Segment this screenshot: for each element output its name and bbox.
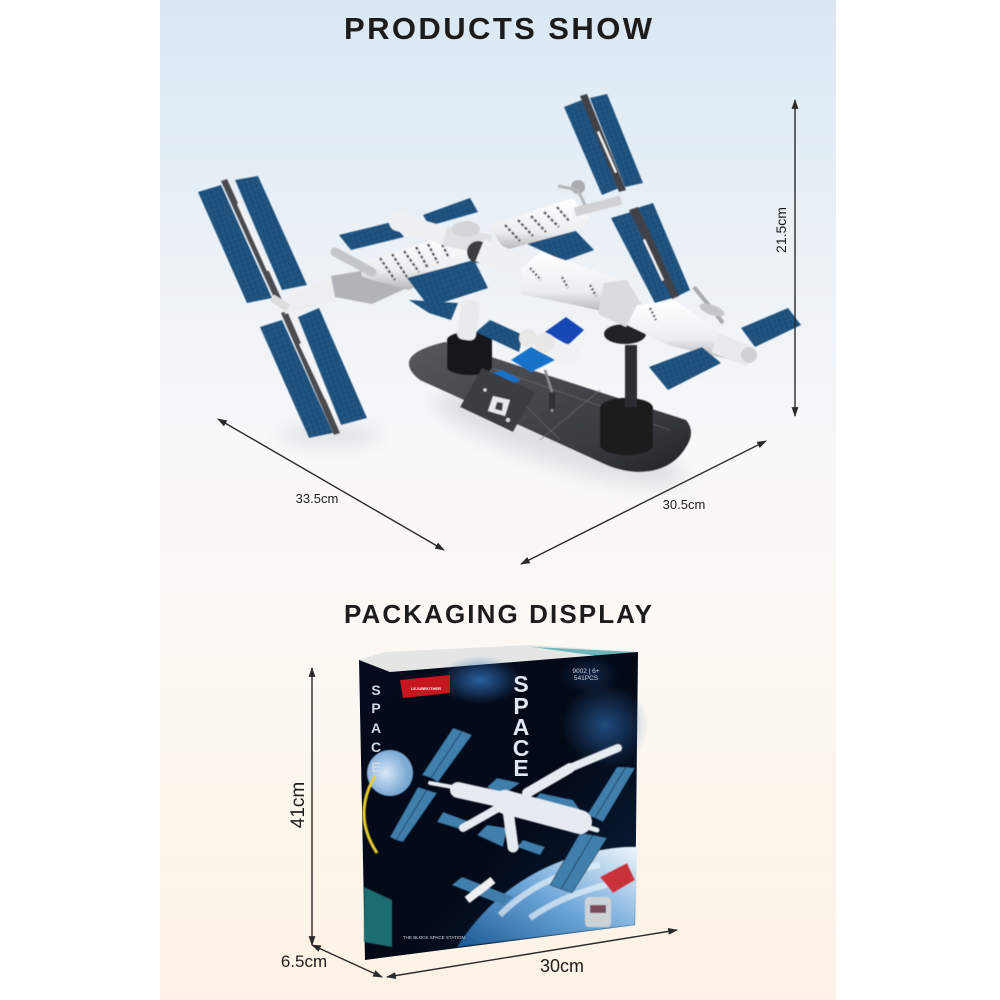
small craft on box <box>452 877 513 905</box>
package box <box>359 645 649 960</box>
nebula clouds <box>438 655 649 767</box>
box small print: THE BLOCK SPACE STATION <box>403 935 465 940</box>
spine title SPACE: E <box>371 759 381 775</box>
front title SPACE: A <box>513 714 529 740</box>
front title SPACE: C <box>513 735 529 761</box>
teal card <box>364 887 392 947</box>
dimension: 30cm <box>387 930 677 977</box>
left module <box>272 221 490 314</box>
brand label <box>400 675 450 698</box>
solar array: far left lower <box>260 308 367 438</box>
small panels behind <box>339 198 594 320</box>
dimension: 6.5cm <box>281 945 382 977</box>
solar array: upper right top <box>564 94 643 195</box>
front title SPACE <box>513 671 529 781</box>
yellow arc <box>364 776 377 853</box>
display base <box>409 299 691 472</box>
upper right module <box>488 180 621 250</box>
product number: 9002 | 6+ <box>572 668 600 675</box>
dimension: 41cm: 41cm <box>288 782 309 828</box>
front big panel <box>407 260 488 307</box>
spine title SPACE: C <box>371 739 381 755</box>
dimension: 6.5cm: 6.5cm <box>281 952 327 971</box>
background panel <box>160 0 836 1000</box>
rear solar panels <box>649 308 801 390</box>
front title SPACE: P <box>513 693 529 719</box>
astronaut and red flag <box>585 863 635 927</box>
right stand <box>600 398 653 455</box>
plaque <box>460 368 535 432</box>
piece count: 541PCS <box>574 675 599 682</box>
station modules on box <box>430 748 618 847</box>
dimension: 33.5cm: 33.5cm <box>296 491 338 506</box>
dimension: 33.5cm <box>218 419 444 550</box>
moon <box>367 750 413 796</box>
heading: packaging display: PACKAGING DISPLAY <box>344 599 652 629</box>
spine title SPACE: S <box>371 682 381 698</box>
front title SPACE: S <box>513 671 529 697</box>
heading: products show: PRODUCTS SHOW <box>344 11 653 46</box>
core module with rear section <box>467 241 757 363</box>
dimension: 21.5cm: 21.5cm <box>773 207 789 253</box>
station solar arrays on box <box>390 728 635 893</box>
dimension: 30.5cm: 30.5cm <box>663 497 705 512</box>
solar array: far left upper <box>198 176 307 303</box>
brand label: LEJUBROTHER <box>411 686 441 691</box>
box top <box>359 645 637 672</box>
dimension: 30.5cm <box>521 441 766 564</box>
spine title SPACE: P <box>371 700 381 716</box>
docked spacecraft <box>476 317 584 412</box>
solar array: upper right bottom <box>611 203 690 303</box>
spine title SPACE <box>371 682 381 775</box>
left stand <box>447 332 492 375</box>
ground shadow <box>280 375 692 505</box>
spine title SPACE: A <box>371 720 381 736</box>
product: space station model <box>198 94 801 505</box>
dimension: 30cm: 30cm <box>540 956 584 976</box>
earth <box>457 847 637 947</box>
box front <box>359 652 638 960</box>
front title SPACE: E <box>513 755 529 781</box>
